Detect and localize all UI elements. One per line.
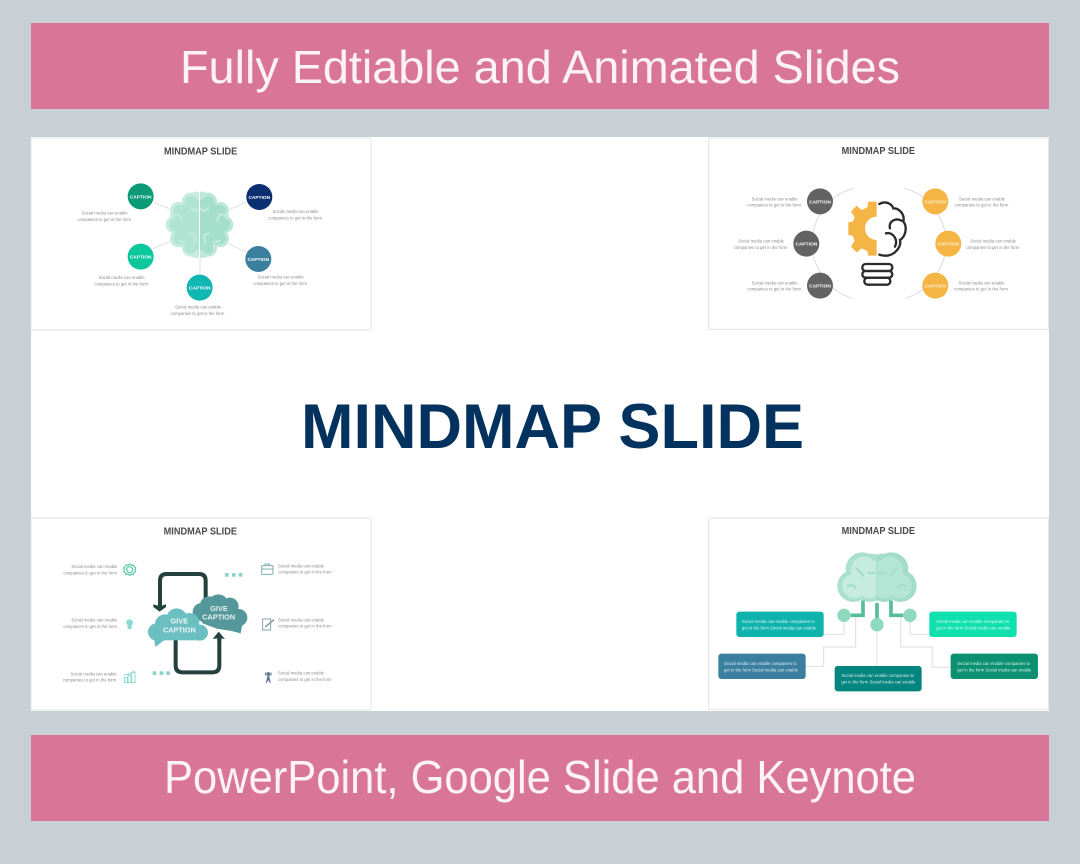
box: bright green: [929, 612, 1017, 637]
panel heading: MINDMAP SLIDE: [842, 146, 915, 157]
text: right description 3: companies to get in the form: [278, 677, 332, 682]
text: left description 2: [63, 618, 118, 629]
node: caption teal: CAPTION: [189, 286, 211, 292]
node: caption navy: CAPTION: [248, 195, 271, 201]
text: left description 1: companies to get in the form: [747, 203, 802, 208]
text: right description 3: Social media can enable: [278, 671, 325, 676]
box: dark teal: get in the form Social media can enable: [841, 679, 916, 684]
text: caption description 3: companies to get in the form: [94, 281, 149, 286]
panel: lightbulb mindmap top right: [709, 138, 1049, 329]
text: left description 2: companies to get in the form: [63, 624, 118, 629]
text: left description 3: companies to get in the form: [63, 678, 117, 683]
bottom banner: [31, 735, 1049, 821]
top banner: [31, 23, 1049, 109]
node: caption yellow 3: [922, 273, 948, 299]
grey connector lines: [806, 617, 951, 667]
panel heading: MINDMAP SLIDE: [842, 526, 915, 537]
cloud: front give caption: GIVE: [171, 617, 188, 626]
box: dark green: get in the form Social media can enable: [957, 667, 1032, 672]
box: dark teal: [835, 666, 922, 691]
cloud: back give caption: [193, 594, 247, 633]
box: teal: Social media can enable companies to: [742, 619, 815, 624]
text: right description 2: Social media can enable: [278, 617, 325, 622]
arcs connecting nodes: [812, 188, 946, 298]
text: right description 2: [966, 239, 1020, 250]
text: right description 3: Social media can enable: [959, 280, 1005, 285]
icon: pencil note: [263, 619, 274, 630]
text: left description 2: Social media can enable: [71, 618, 118, 623]
text: caption description 2: [268, 209, 323, 220]
text: left description 3: [747, 280, 802, 292]
icon: lightbulb: [124, 617, 136, 629]
arrow: top loop: [153, 574, 206, 612]
text: caption description 3: Social media can enable: [99, 275, 145, 280]
panel: brain tree bottom right: [709, 518, 1049, 709]
text: left description 3: Social media can enable: [752, 280, 798, 285]
text: left description 1: [63, 564, 118, 575]
cloud: back give caption: CAPTION: [202, 613, 235, 622]
icon: brain tree: [837, 552, 917, 602]
box: teal: [736, 612, 824, 637]
icon: briefcase: [262, 564, 273, 574]
node: caption green: CAPTION: [130, 194, 152, 200]
text: caption description 4: Social media can enable: [258, 275, 304, 280]
node: caption yellow 3: CAPTION: [924, 284, 947, 290]
node: caption grey 3: [807, 273, 833, 299]
icon: gear half: [848, 202, 877, 256]
panel heading: MINDMAP SLIDE: [164, 147, 237, 158]
node: caption bright green: [128, 244, 154, 270]
text: caption description 1: Social media can enable: [82, 211, 128, 216]
box: blue: [718, 654, 806, 679]
text: left description 1: companies to get in the form: [63, 570, 118, 575]
panel: brain mindmap top left: [31, 138, 371, 330]
central white area: [31, 137, 1049, 711]
box: dark green: [951, 654, 1038, 679]
text: caption description 5: [171, 305, 225, 316]
icon: brain: [166, 192, 233, 258]
node: caption grey 1: CAPTION: [809, 199, 831, 205]
text: left description 2: [734, 239, 788, 250]
node: caption blue: CAPTION: [247, 257, 270, 263]
nodes: [837, 609, 917, 631]
text: caption description 2: Social media can enable: [273, 209, 319, 214]
node: caption grey 3: CAPTION: [809, 284, 831, 290]
icon: brain outline half: [879, 203, 906, 256]
box: dark teal: Social media can enable companies to: [841, 673, 915, 678]
panel heading: MINDMAP SLIDE: [164, 527, 237, 538]
connector lines: [153, 202, 247, 275]
text: left description 3: Social media can enable: [71, 671, 117, 676]
text: left description 2: Social media can enable: [738, 239, 785, 244]
text: caption description 1: [77, 211, 132, 222]
node: caption yellow 1: CAPTION: [924, 199, 947, 205]
node: caption blue: [245, 246, 271, 272]
text: left description 3: [63, 671, 117, 683]
text: left description 1: [747, 196, 802, 208]
text: caption description 1: companies to get in the form: [77, 217, 132, 222]
text: right description 1: Social media can enable: [278, 563, 325, 568]
node: caption yellow 1: [922, 188, 948, 214]
text: caption description 4: [253, 275, 308, 286]
text: caption description 4: companies to get in the form: [253, 281, 308, 286]
text: caption description 5: Social media can enable: [175, 305, 222, 310]
node: caption navy: [246, 184, 272, 210]
circuit connectors: [851, 600, 903, 619]
text: right description 2: companies to get in the form: [278, 624, 332, 629]
icon: gear: [124, 564, 136, 575]
text: right description 2: [278, 617, 332, 629]
cloud: front give caption: CAPTION: [163, 625, 196, 634]
arrow: bottom loop: [176, 632, 225, 672]
node: caption bright green: CAPTION: [130, 255, 152, 261]
node: caption grey 1: [807, 188, 833, 214]
text: right description 1: [955, 196, 1009, 208]
dots top right: [225, 573, 242, 577]
text: right description 3: [954, 280, 1009, 292]
text: right description 3: [278, 671, 332, 682]
node: caption yellow 2: CAPTION: [937, 242, 960, 248]
icon: bar chart: [124, 671, 135, 683]
box: blue: Social media can enable companies to: [724, 661, 797, 666]
text: right description 1: companies to get in the form: [278, 570, 332, 575]
text: right description 1: companies to get in the form: [955, 203, 1009, 208]
cloud: back give caption: GIVE: [210, 604, 228, 613]
text: caption description 5: companies to get in the form: [171, 311, 225, 316]
icon: bulb base: [862, 264, 892, 285]
box: dark green: Social media can enable companies to: [957, 661, 1031, 666]
text: left description 2: companies to get in the form: [734, 245, 788, 250]
box: bright green: Social media can enable companies to: [936, 619, 1010, 624]
box: blue: get in the form Social media can enable: [724, 667, 799, 672]
text: left description 1: Social media can enable: [752, 196, 798, 201]
text: caption description 2: companies to get in the form: [268, 215, 323, 220]
box: teal: get in the form Social media can enable: [742, 625, 817, 630]
icon: tower: [266, 672, 271, 683]
node: caption grey 2: CAPTION: [795, 242, 818, 248]
box: bright green: get in the form Social media can enable: [936, 625, 1011, 630]
text: right description 2: Social media can enable: [970, 239, 1017, 244]
text: right description 1: [278, 563, 332, 575]
text: right description 2: companies to get in the form: [966, 245, 1020, 250]
text: caption description 3: [94, 275, 149, 286]
text: right description 1: Social media can enable: [959, 196, 1006, 201]
node: caption teal: [187, 275, 213, 301]
dots bottom left: [153, 671, 170, 675]
text: right description 3: companies to get in the form: [954, 287, 1009, 292]
node: caption grey 2: [793, 231, 819, 257]
main title: MINDMAP SLIDE: [301, 392, 804, 462]
node: caption green: [128, 183, 154, 209]
text: left description 1: Social media can enable: [71, 564, 118, 569]
panel: clouds cycle bottom left: [31, 518, 371, 710]
top banner: Fully Edtiable and Animated Slides: [180, 41, 900, 93]
text: left description 3: companies to get in the form: [747, 287, 802, 292]
bottom banner: PowerPoint, Google Slide and Keynote: [164, 751, 916, 803]
cloud: front give caption: [148, 608, 208, 647]
node: caption yellow 2: [935, 231, 961, 257]
